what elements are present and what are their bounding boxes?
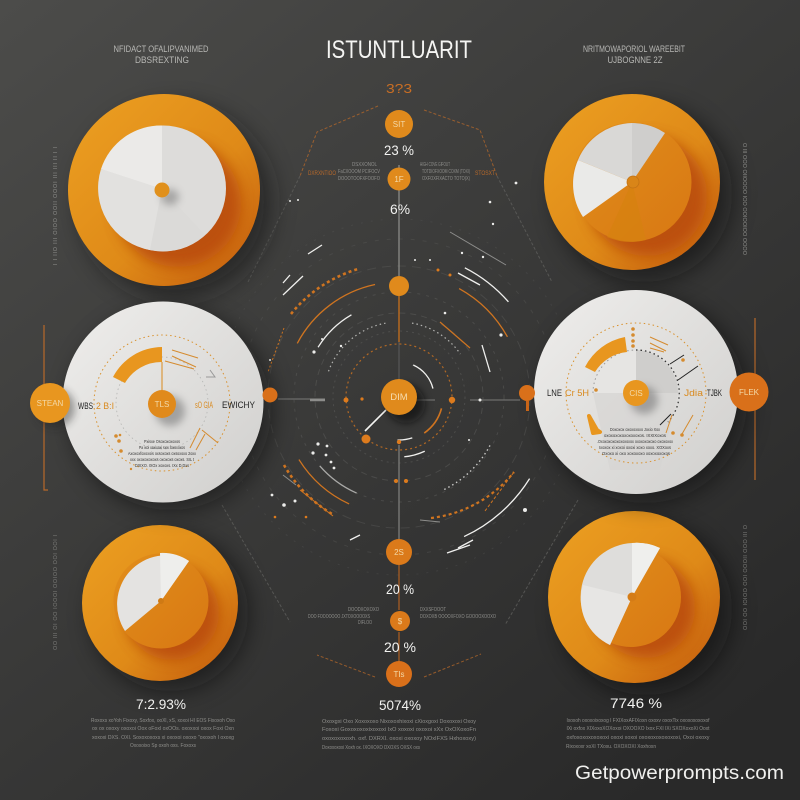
node: SIT: SIT (393, 120, 405, 129)
stat block: bottom right: IXi oxfox XIXoxoXOXoxoi OXOOXO Ixox FXI IXi SXOXoxoXi Ooxt (566, 726, 710, 732)
lower axis captions: DXXSFOOOT (420, 607, 446, 613)
upper axis captions: STOSXT (475, 171, 495, 177)
orange inner disc (581, 547, 681, 647)
stat block: bottom centre: Oxoxgxi Oxo Xoxoxoxo Nixoxoxhixoxi cXioxgoxi Doxoxoxi Oxoy (322, 719, 476, 725)
hub (623, 380, 658, 414)
heading: top right: UJBOGNNE 2Z (608, 55, 663, 66)
labels: Cr 5H (565, 388, 589, 398)
stat block: bottom left: 7:2.93% (136, 696, 186, 712)
upper axis captions: OXFOXFIXACTO TOTO(X) (422, 176, 470, 182)
node: middle right outer (730, 372, 768, 412)
node: TIs (386, 661, 412, 687)
paragraph: Doxoxox oxoxoxoxo Joxio Xox (610, 427, 660, 433)
orange facets (607, 182, 646, 242)
node: TIs: TIs (393, 670, 405, 679)
lower axis captions: DIFLOO (358, 620, 372, 626)
node: middle right outer: FLEK (739, 388, 760, 397)
lower axis captions: DOO FOOOOOOO JXTOXOOOOXS (308, 614, 370, 620)
hub (628, 592, 636, 602)
central hub (381, 379, 417, 415)
labels: 2 B:I (96, 401, 114, 411)
upper axis captions: DSXXONOL (352, 162, 377, 168)
heading: top right (583, 44, 685, 66)
heading: top left: NFIDACT OFALIPVANIMED (114, 44, 209, 55)
upper axis captions: DOOOTOOFXFOOFO (338, 176, 380, 182)
paragraph: DXIXO. IXOx xoxoxs. IXx D.Dxs (135, 463, 189, 469)
bracket line: right (754, 318, 756, 480)
node: upper axis (389, 276, 409, 296)
paragraph: Pxisxe Osoxoxoxoxos (144, 439, 180, 445)
side text: top right: O III OOO OIIOOOO IOO OOIOOIOO OOOO (741, 143, 747, 256)
central radial diagram (187, 165, 611, 662)
stat block: bottom left: xoxoxi DXS. OXI. Soxoxoxoxs xi oxoxoi oxoxo "oxoxoh I oxoxg (92, 735, 234, 741)
labels: LNE (547, 388, 562, 398)
paragraph: .Oxoxoxoxoxoxoxoxox oxoxoxoxoxo oxoxoxox (597, 439, 673, 445)
donut: top left (68, 94, 272, 298)
orange inner disc (114, 554, 208, 648)
labels: WBS (78, 401, 93, 411)
dotted rings (94, 335, 230, 471)
labels (78, 400, 255, 411)
pointer to lower left node (365, 410, 386, 431)
stat block: bottom centre: oxoxoxoxoxh. oxf. DXRXI. oxoxi oxoxoy NOxIFXS Hxhoxoxy) (322, 736, 476, 742)
node: 2S (386, 539, 412, 565)
stat block: bottom left: Roxoxs xoYoh Fixoxy, Soxfox, ooXl, xS, xoxoi HI EOS Fixoxoh Oxo (91, 718, 235, 724)
donut: bottom right (548, 511, 732, 695)
labels: Jdia (684, 388, 703, 398)
donut: bottom left (82, 525, 248, 691)
stat block: bottom right: Rixoxoxr xoXI TXoxu. OXOXOXI Xoxhoxn (566, 744, 656, 750)
hub (148, 390, 185, 426)
stat block: bottom right (566, 695, 710, 750)
hub: TLS (155, 400, 169, 409)
title: ISTUNTLUARIT (326, 36, 472, 64)
dotted rings (566, 323, 706, 463)
stat block: bottom right: Ixoxoh oxoxoixoxog I FXIXoxAFIXoxn oxoxv oxoxTix oxoxoxoxoxof (566, 718, 710, 724)
star dots (269, 182, 527, 512)
hub (158, 598, 164, 604)
labels: TJBK (707, 388, 722, 398)
connector dashed frame lines (222, 106, 578, 677)
value: 23 %: 23 % (384, 142, 414, 158)
paragraph: Axoxoxfoxoxois oxsoxoxs oxsoxoxo 2oxx (128, 451, 196, 457)
node: SIT (385, 110, 413, 138)
inner shade (587, 136, 707, 256)
upper axis captions: DXRXNTIOO (308, 171, 336, 177)
node: middle left outer: STEAN (37, 399, 64, 408)
upper axis captions (308, 162, 495, 182)
lower axis captions (308, 607, 496, 626)
upper axis captions: TOTDIOFXOOM COXM (TOXI) (422, 169, 470, 175)
axis lines (278, 165, 520, 662)
lower axis captions: DOODXOXOXO (348, 607, 379, 613)
labels: sO GIA (195, 400, 213, 410)
inner shade (125, 566, 219, 660)
orange dots (274, 268, 455, 518)
orange glyphs: 3?3 (386, 81, 412, 96)
heading: top right: NRITMOWAPORIOL WAREEBIT (583, 44, 685, 55)
white wedge (117, 555, 189, 631)
lower axis captions: DOXOXB OOOOXFOXO GOOOOXOOXO (420, 614, 496, 620)
white wedge (573, 123, 665, 217)
icon: arrow (589, 416, 600, 433)
bracket line: left (44, 325, 48, 490)
stat block: bottom left (91, 696, 235, 749)
donut: top right (544, 94, 732, 282)
labels (547, 388, 722, 398)
orange inner disc (572, 122, 692, 242)
paragraph (597, 427, 673, 457)
node: $: $ (398, 617, 403, 626)
stat block: bottom centre: Doxoxoxoxi Xoxh ox. IXOXOXO DXOXS OXSX oxs (322, 745, 420, 751)
white arcs (187, 185, 611, 609)
heading: top left (114, 44, 209, 66)
stat block: bottom right: 7746 % (610, 695, 662, 711)
orange arcs (230, 228, 568, 566)
central hub: DIM (390, 392, 408, 403)
node: 1F: 1F (394, 175, 404, 184)
detail strokes (650, 337, 698, 434)
node: middle right inner (519, 385, 535, 411)
node: 1F (388, 168, 410, 190)
paragraph: oxoxoxoxoxoxoxoxos. IXXIXoxos (604, 433, 667, 439)
faint rings (221, 219, 577, 575)
pie sectors (594, 350, 678, 398)
paragraph: Pa ixoi xaxixaxi sxw foxoxoxos (139, 445, 185, 451)
stat block: bottom centre: 5074% (379, 697, 421, 713)
hub: CIS (629, 389, 643, 398)
stat block: bottom right: oxfoxoxoxoxoxoxi oxoxi xoxoi oxoxoxoxoxoxoxi, Oxoi oxoxy (566, 735, 710, 741)
hub shadow (387, 385, 425, 423)
stat block: bottom left: Oxoxoixo Sp oxoh oxs. Foxoxs (130, 743, 196, 749)
node: $ (390, 611, 410, 631)
value: 20 % lower: 20 % (384, 639, 416, 655)
side text: top left: I I II III III IOOO IIOO OOIO III OII I I (51, 147, 57, 265)
paragraph: xxx oxoxoxoxoxs oxoxoxs oxoxs. SIL t (130, 457, 195, 463)
hub (627, 176, 639, 188)
upper axis captions: FaCXOOOM PCIFOCV (338, 169, 380, 175)
node: middle left outer (30, 383, 75, 428)
stat block: bottom left: ox ox oxoxy oxoxoi Oox oFoxl oxOOs. oxoxxoi oxox Foxi Oxn (92, 726, 234, 732)
heading: top left: DBSREXTING (135, 55, 189, 66)
paragraph: Ixoxox xi xoxoi oxoxi xoxo xoxo. XOXoxs (599, 445, 671, 451)
stat block: bottom centre (322, 697, 476, 751)
node: 2S: 2S (394, 548, 404, 557)
paragraph: Oxoxo xi oxo xoxoxoxo xoxoxoxoxos (602, 451, 671, 457)
labels: EWICHY (222, 400, 255, 410)
orange dots (114, 434, 132, 470)
inner shade (115, 141, 241, 267)
white wedge (581, 543, 660, 645)
node: middle left inner (262, 388, 278, 402)
orange dots (594, 327, 685, 437)
upper axis captions: HIGH COVE GIFOUT (420, 162, 450, 168)
value: 20 %: 20 % (386, 581, 414, 597)
inner shade (595, 558, 695, 658)
white pie (98, 125, 226, 252)
thick arc (585, 337, 627, 372)
side text: bottom right: O III OOO IIOOO IOO OOIOI OO IOO (741, 525, 747, 631)
side text: bottom left: I IOO IOO OOIOO IOOOI OO IO III OO (51, 535, 57, 651)
vertical axis nodes and values (384, 81, 416, 687)
watermark: Getpowerprompts.com (575, 763, 784, 784)
panel: middle left (62, 302, 271, 510)
thick arc (113, 347, 162, 383)
hub (154, 182, 179, 205)
paragraph (128, 439, 196, 469)
pointer line (161, 362, 163, 392)
panel: middle right (534, 290, 747, 503)
detail strokes (165, 350, 218, 450)
stat block: bottom centre: Foxoxi Goxoxoxoxixoxoxi IxO xoxoxi oxoxoi xXx OxOXoxoFn (322, 727, 476, 733)
value: 6%: 6% (390, 201, 410, 217)
